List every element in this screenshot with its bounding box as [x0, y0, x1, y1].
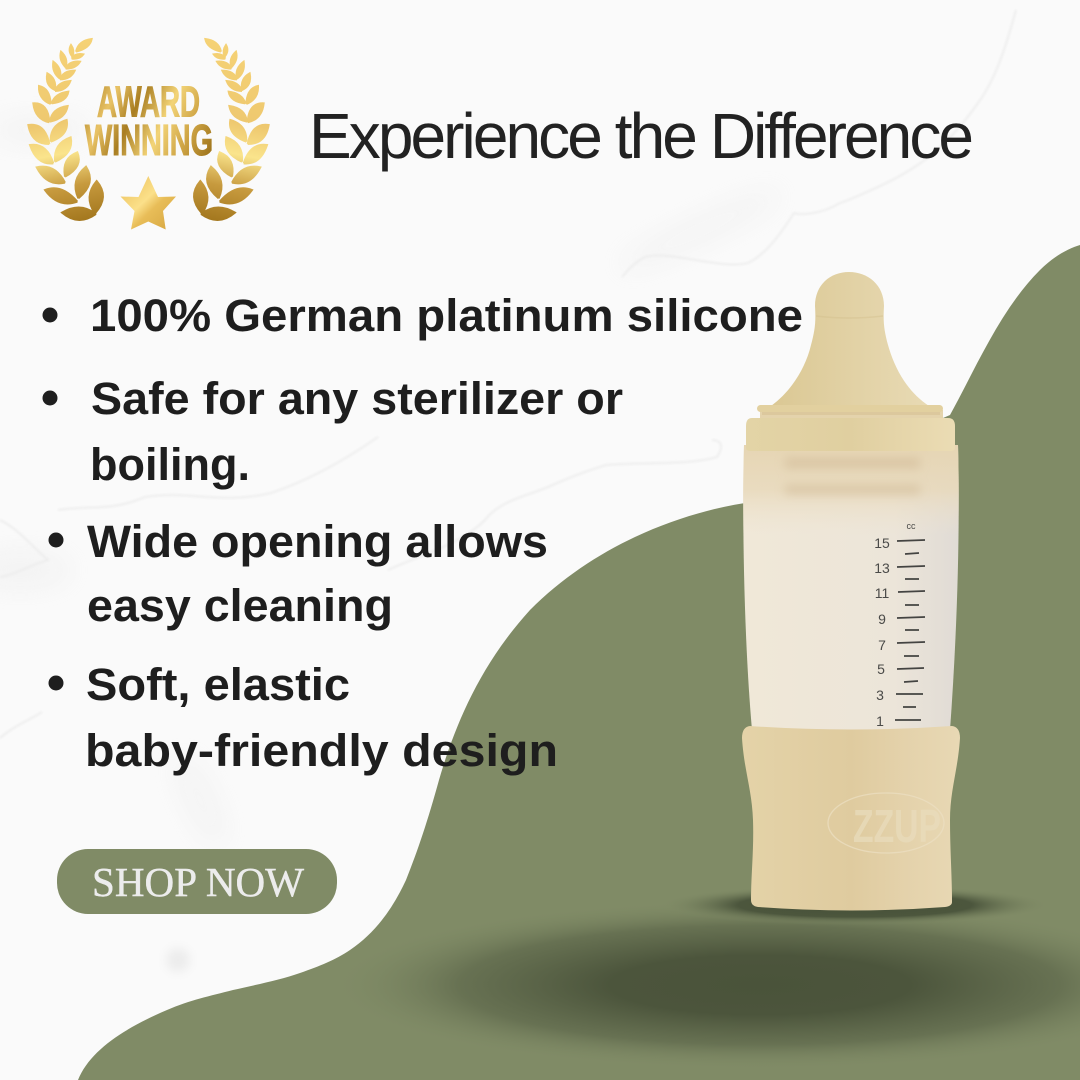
bullet list	[42, 290, 803, 776]
small marble spot	[166, 948, 190, 972]
bottle flange	[757, 405, 943, 422]
volume scale: 1	[876, 713, 884, 729]
bullet: sterilizer safe: Safe for any sterilizer or	[91, 373, 623, 424]
volume scale: 5	[877, 661, 885, 677]
bullet: soft elastic: Soft, elastic	[86, 659, 350, 710]
bullet: soft elastic: baby-friendly design	[85, 725, 558, 776]
badge text: award winning	[85, 78, 213, 165]
icon: gold star	[120, 176, 176, 230]
volume scale	[874, 521, 925, 729]
volume scale: 9	[878, 611, 886, 627]
bullet: wide opening: easy cleaning	[87, 580, 393, 631]
volume scale: 7	[878, 637, 886, 653]
silicone sleeve	[742, 726, 960, 910]
volume scale: 13	[874, 560, 890, 576]
award badge	[28, 39, 269, 229]
badge text: award winning: WINNING	[85, 116, 213, 165]
green wave shape	[78, 245, 1080, 1080]
volume scale: 3	[876, 687, 884, 703]
volume scale: cc	[906, 521, 916, 531]
shop now button	[57, 849, 337, 914]
volume scale: 11	[875, 585, 889, 601]
bottle threads	[785, 458, 920, 494]
sleeve logo: ZZUP	[853, 800, 941, 852]
bottle collar	[746, 418, 955, 451]
frosted bottle body	[743, 445, 959, 730]
laurel wreath left	[28, 39, 103, 220]
bullet: sterilizer safe: boiling.	[90, 439, 250, 490]
body upper tint	[743, 445, 959, 535]
laurel wreath right	[194, 39, 269, 220]
nipple head seam	[816, 316, 883, 318]
volume scale: 15	[874, 535, 890, 551]
bullet: german platinum silicone: 100% German platinum silicone	[90, 290, 803, 341]
bottle	[742, 272, 960, 910]
bullet: wide opening: Wide opening allows	[87, 516, 548, 567]
shop now button: SHOP NOW	[92, 859, 304, 905]
bullet: soft elastic	[48, 659, 558, 776]
badge text: award winning: AWARD	[97, 78, 200, 126]
bullet: wide opening	[48, 516, 548, 631]
floor shadows	[403, 892, 1080, 1056]
sleeve logo	[828, 793, 944, 853]
title: Experience the Difference	[309, 100, 974, 172]
bottle nipple	[771, 272, 929, 406]
bullet: sterilizer safe	[42, 373, 623, 490]
